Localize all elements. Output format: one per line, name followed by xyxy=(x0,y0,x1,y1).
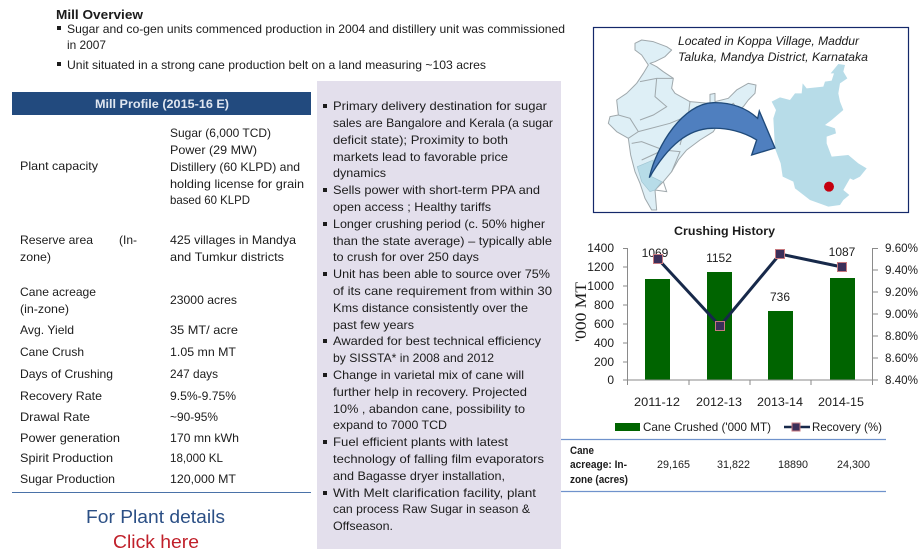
table row: sugar production xyxy=(20,472,237,486)
table row: recovery rate: 9.5%-9.75% xyxy=(170,389,236,403)
left axis labels: 200 xyxy=(594,355,614,369)
legend xyxy=(615,420,882,434)
table row: spirit production xyxy=(20,451,223,465)
legend: Cane Crushed ('000 MT) xyxy=(643,420,771,434)
bullet: power sales: Sells power with short-term PPA and xyxy=(333,183,540,197)
table row: sugar production: Sugar Production xyxy=(20,472,115,486)
bullet: varietal mix xyxy=(323,368,527,432)
table: cane acreage in-zone: 18890 xyxy=(778,459,808,471)
bullet: cane sourcing xyxy=(323,267,552,332)
bullet: varietal mix: expand to 7000 TCD xyxy=(333,418,447,432)
table row: spirit production: 18,000 KL xyxy=(170,451,223,465)
table row: plant capacity xyxy=(20,126,304,207)
table: cane acreage in-zone: 29,165 xyxy=(657,459,690,471)
bullet: delivery destination: deficit state); Proximity to both xyxy=(333,133,508,147)
text block: overview bullets: in 2007 xyxy=(67,38,106,52)
table row: plant capacity: Plant capacity xyxy=(20,159,98,173)
bullet: melt clarification xyxy=(323,486,537,533)
heading: mill profile: Mill Profile (2015-16 E) xyxy=(95,97,229,111)
text block: overview bullets: Unit situated in a strong cane production belt on a land measuring ~103 acres xyxy=(67,58,486,72)
bullet: melt clarification: With Melt clarification facility, plant xyxy=(333,486,537,500)
table row: plant capacity: Distillery (60 KLPD) and xyxy=(170,160,300,174)
table row: reserve area: (In- xyxy=(119,233,137,247)
table: cane acreage in-zone: acreage: In- xyxy=(570,459,627,471)
left axis labels: 1000 xyxy=(587,279,614,293)
table row: drawal rate xyxy=(20,410,218,424)
table row: cane acreage: (in-zone) xyxy=(20,302,69,316)
bullet: crushing period: than the state average) – typically able xyxy=(333,234,552,248)
heading: crushing history: Crushing History xyxy=(674,224,775,238)
data labels: 1152 xyxy=(706,251,732,265)
category labels: 2014-15 xyxy=(818,395,864,409)
table row: reserve area: 425 villages in Mandya xyxy=(170,233,296,247)
table row: plant capacity: based 60 KLPD xyxy=(170,193,250,207)
table row: power generation: 170 mn kWh xyxy=(170,431,239,445)
table row: reserve area xyxy=(20,233,296,264)
table row: avg yield xyxy=(20,323,238,337)
bullet: varietal mix: Change in varietal mix of cane will xyxy=(333,368,524,382)
table: cane acreage in-zone: 31,822 xyxy=(717,459,750,471)
bullet: delivery destination: dynamics xyxy=(333,166,386,180)
legend: Recovery (%) xyxy=(812,420,882,434)
table row: reserve area: zone) xyxy=(20,250,51,264)
table row: power generation xyxy=(20,431,239,445)
text block: overview bullets: Sugar and co-gen units commenced production in 2004 and distillery unit was commissioned xyxy=(67,22,565,36)
table row: avg yield: Avg. Yield xyxy=(20,323,74,337)
bullet: power sales xyxy=(323,183,540,214)
data labels: 1069 xyxy=(642,246,669,260)
table row: days of crushing: 247 days xyxy=(170,367,218,381)
table row: days of crushing: Days of Crushing xyxy=(20,367,113,381)
bullet: cane sourcing: of its cane requirement from within 30 xyxy=(333,284,552,298)
panel: mill profile table xyxy=(12,92,311,492)
table row: plant capacity: Power (29 MW) xyxy=(170,143,257,157)
table row: reserve area: and Tumkur districts xyxy=(170,250,284,264)
table row: cane crush: 1.05 mn MT xyxy=(170,345,237,359)
bullet: crushing period xyxy=(323,217,552,264)
callout: plant details link: For Plant details xyxy=(86,507,225,527)
table row: cane acreage: 23000 acres xyxy=(170,293,237,307)
table row: drawal rate: ~90-95% xyxy=(170,410,218,424)
heading: mill overview: Mill Overview xyxy=(56,7,144,22)
bullet: melt clarification: Offseason. xyxy=(333,519,393,533)
left axis labels: 400 xyxy=(594,336,614,350)
data labels: 736 xyxy=(770,290,790,304)
bullet: varietal mix: 10% , abandon cane, possibility to xyxy=(333,402,525,416)
table row: days of crushing xyxy=(20,367,218,381)
bullet: power sales: open access ; Healthy tariffs xyxy=(333,200,491,214)
bullet: delivery destination xyxy=(323,99,553,180)
chart: crushing history xyxy=(573,224,918,434)
bullet: cane sourcing: Kms distance consistently over the xyxy=(333,301,528,315)
table row: power generation: Power generation xyxy=(20,431,120,445)
table row: cane acreage: Cane acreage xyxy=(20,285,96,299)
table row: plant capacity: Sugar (6,000 TCD) xyxy=(170,126,271,140)
table row: recovery rate xyxy=(20,389,236,403)
text block: location note: Taluka, Mandya District, Karnataka xyxy=(678,50,868,64)
table row: cane crush xyxy=(20,345,237,359)
bars: cane crushed xyxy=(645,272,855,380)
table: cane acreage in-zone: 24,300 xyxy=(837,459,870,471)
category labels: 2013-14 xyxy=(757,395,803,409)
bullet: fuel efficiency xyxy=(323,435,544,483)
table row: cane crush: Cane Crush xyxy=(20,345,84,359)
left axis labels xyxy=(587,241,614,387)
data labels xyxy=(642,245,856,304)
bullet: award xyxy=(323,334,541,365)
arrow: india to karnataka xyxy=(649,103,775,178)
heading: mill profile xyxy=(12,92,311,115)
text block: overview bullets xyxy=(57,22,565,72)
marker: mill location xyxy=(824,182,834,192)
callout: plant details link: Click here xyxy=(113,532,199,552)
bullet: cane sourcing: past few years xyxy=(333,318,414,332)
text block: location note: Located in Koppa Village, Maddur xyxy=(678,34,860,48)
table row: plant capacity: holding license for grain xyxy=(170,177,304,191)
left axis labels: 800 xyxy=(594,298,614,312)
right axis labels xyxy=(885,241,918,387)
table row: cane acreage xyxy=(20,285,237,316)
table row: drawal rate: Drawal Rate xyxy=(20,410,90,424)
table row: reserve area: Reserve area xyxy=(20,233,93,247)
text block: location note xyxy=(678,34,868,64)
table row: avg yield: 35 MT/ acre xyxy=(170,323,238,337)
bullet: fuel efficiency: Fuel efficient plants with latest xyxy=(333,435,509,449)
bullet: fuel efficiency: technology of falling film evaporators xyxy=(333,452,544,466)
bullet: cane sourcing: Unit has been able to source over 75% xyxy=(333,267,550,281)
category labels: 2011-12 xyxy=(634,395,680,409)
panel: highlights xyxy=(317,81,561,549)
panel: mill overview xyxy=(56,7,565,72)
table row: recovery rate: Recovery Rate xyxy=(20,389,102,403)
map: karnataka xyxy=(772,64,867,207)
bullet: delivery destination: sales are Bangalore and Kerala (a sugar xyxy=(333,116,553,130)
left axis labels: 1400 xyxy=(587,241,614,255)
table: cane acreage in-zone xyxy=(561,440,886,492)
left axis labels: 1200 xyxy=(587,260,614,274)
bullet: delivery destination: Primary delivery destination for sugar xyxy=(333,99,547,113)
panel: location map xyxy=(594,28,908,212)
data labels: 1087 xyxy=(829,245,856,259)
left axis title: '000 MT xyxy=(573,282,590,342)
callout: plant details link xyxy=(86,507,225,552)
bullet: varietal mix: further help in recovery. Projected xyxy=(333,385,527,399)
category labels xyxy=(634,395,864,409)
bullet: fuel efficiency: and Bagasse dryer installation, xyxy=(333,469,505,483)
bullet: crushing period: to crush for over 250 days xyxy=(333,250,479,264)
line: recovery xyxy=(654,250,846,330)
map: india xyxy=(608,40,756,210)
bullet: award: by SISSTA* in 2008 and 2012 xyxy=(333,351,494,365)
bullet: crushing period: Longer crushing period (c. 50% higher xyxy=(333,217,545,231)
left axis labels: 600 xyxy=(594,317,614,331)
table: cane acreage in-zone: Cane xyxy=(570,445,594,457)
table: cane acreage in-zone: zone (acres) xyxy=(570,474,628,486)
table row: sugar production: 120,000 MT xyxy=(170,472,237,486)
bullet: delivery destination: markets lead to favorable price xyxy=(333,150,508,164)
category labels: 2012-13 xyxy=(696,395,742,409)
left axis labels: 0 xyxy=(607,373,614,387)
bullet: award: Awarded for best technical efficiency xyxy=(333,334,541,348)
bullet: melt clarification: can process Raw Sugar in season & xyxy=(333,502,530,516)
table row: spirit production: Spirit Production xyxy=(20,451,113,465)
